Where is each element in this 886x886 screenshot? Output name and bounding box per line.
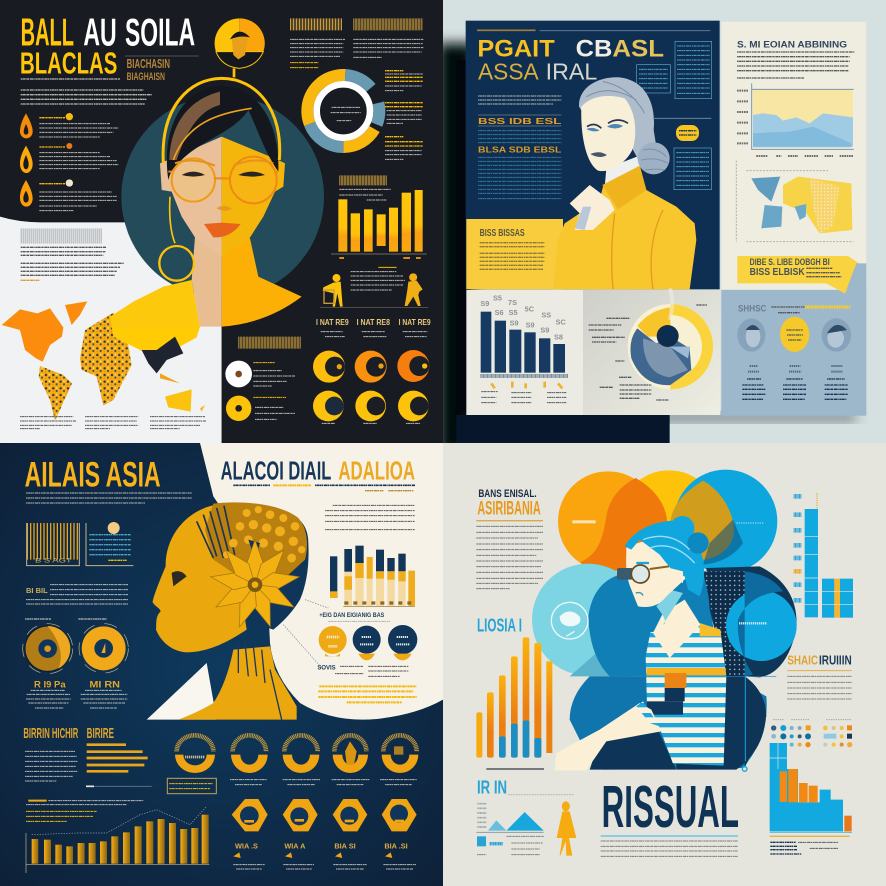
- head icon captions: BIA .SI: [384, 841, 408, 850]
- ring charts: MI RN: [89, 679, 120, 689]
- bar chart: navy: 7S: [508, 298, 517, 307]
- right text: [787, 671, 852, 699]
- panel: bottom-right pale infographic with blue-haired woman: [443, 443, 886, 886]
- panel: bottom left: [466, 290, 583, 415]
- banner callout: BISS ELBISK: [750, 267, 805, 278]
- icon legend: [771, 720, 852, 747]
- panel: bottom-left navy infographic with profile: [0, 443, 443, 886]
- head icon captions: BIA SI: [334, 841, 356, 850]
- text note: BI BIL: [26, 586, 48, 595]
- title: CB: [576, 36, 612, 63]
- white wedge: [147, 663, 217, 720]
- note box: [167, 778, 216, 794]
- icon: discs with notes: [225, 361, 295, 421]
- icon: flower: [209, 540, 301, 630]
- head icons: [232, 799, 417, 831]
- top rule: [477, 28, 536, 33]
- head icon captions: [233, 841, 416, 869]
- portrait: woman with glasses: [110, 78, 324, 328]
- badges: [319, 625, 417, 660]
- left text block: BSS IDB ESL: [478, 116, 562, 126]
- title: SOILA: [125, 11, 195, 54]
- left text: [476, 521, 543, 589]
- pie chart: [589, 288, 713, 400]
- banner callout: DIBE S. LIBE DOBGH BI: [750, 257, 830, 267]
- text boxes: [637, 41, 712, 190]
- bar chart: navy: [480, 294, 568, 403]
- title: BALL: [21, 11, 74, 54]
- map: pale yellow and blue: [736, 161, 854, 242]
- bottom-right bar chart: [770, 743, 852, 854]
- right annotations: [317, 666, 417, 702]
- bar chart: navy: SC: [556, 317, 567, 326]
- heading right: S. MI EOIAN ABBINING: [737, 40, 847, 50]
- bar chart: navy: S5: [493, 294, 502, 303]
- left heading: BANS ENISAL.: [478, 488, 537, 500]
- icon: person: [557, 801, 576, 856]
- yellow box text: [480, 228, 545, 269]
- portraits row: SHHSC: [738, 304, 767, 314]
- label row heading: +EIG DAN EIGIANIG BAS: [319, 613, 384, 619]
- right subtitle: [233, 485, 415, 491]
- panel: top-right poster with yellow sweater: [443, 0, 886, 443]
- small circle charts: [313, 350, 429, 423]
- title rule: [601, 834, 738, 838]
- bar chart: navy: 5C: [525, 305, 535, 314]
- text note: [26, 585, 128, 604]
- bar chart: navy: S9: [480, 299, 489, 308]
- three small stats: I NAT RE9: [399, 317, 431, 327]
- panel: top-left dark portrait infographic: [0, 0, 443, 443]
- panel: cream blob: [200, 443, 443, 720]
- bottom-left heading: BIRRIN HICHIR: [23, 726, 79, 742]
- three small stats: I NAT RE9: [316, 317, 349, 327]
- poster shadow: [438, 43, 856, 453]
- title: AILAIS ASIA: [25, 456, 161, 495]
- bar chart: navy: S9: [510, 319, 519, 328]
- bottom-left heading: BIRIRE: [87, 726, 114, 742]
- bar chart: navy: S5: [509, 308, 518, 317]
- intro text lines: [21, 79, 152, 104]
- panel: bottom right: [721, 290, 866, 416]
- callout: yellow pill: [676, 125, 699, 141]
- portrait: woman in yellow sweater: [553, 77, 711, 289]
- stacked bars: [330, 546, 415, 606]
- overlapping circles: [558, 470, 777, 573]
- top right text: [290, 39, 423, 57]
- mini heading: LIOSIA I: [477, 614, 522, 635]
- right annotations: SOVIS: [317, 666, 336, 672]
- arch captions: [230, 780, 417, 785]
- profile portrait: [153, 502, 309, 720]
- panel: bottom centre: [583, 290, 720, 415]
- subheading: BIAGHAISN: [127, 71, 165, 83]
- icon: top portrait badge: [215, 18, 265, 77]
- icon list: three drops: [20, 113, 118, 211]
- three small stats: [316, 317, 431, 327]
- title: ASL: [612, 36, 664, 63]
- right heading: SHAIC: [787, 653, 818, 667]
- icons: standing figures with text: [320, 267, 428, 307]
- title: RISSUAL: [602, 773, 739, 840]
- section heading: [238, 325, 301, 361]
- donut annotations: [385, 71, 423, 159]
- left text block: BLSA SDB EBSL: [478, 145, 562, 155]
- white area text: [21, 247, 124, 275]
- title: [20, 11, 195, 81]
- mountain chart: [476, 795, 575, 855]
- ring charts: R I9 Pa: [34, 679, 66, 689]
- top right headings: [290, 6, 423, 42]
- rising bars chart: [476, 637, 552, 769]
- connector lines: [283, 600, 328, 670]
- three small stats: I NAT RE8: [357, 317, 390, 327]
- left intro lines: [26, 493, 192, 503]
- icon: brain badge: [551, 602, 588, 639]
- barcode heading: [21, 213, 102, 259]
- title: BLACLAS: [20, 47, 117, 81]
- portrait: woman with blue hair: [555, 516, 726, 770]
- title: IRAL: [546, 58, 597, 84]
- barcode chart and note: B S AGT: [35, 558, 72, 564]
- yellow box text: BISS BISSAS: [480, 228, 525, 239]
- bar chart: navy: S9: [540, 326, 549, 335]
- right heading: [787, 653, 852, 667]
- panel: yellow box: [466, 219, 563, 289]
- right heading: IRUIIIN: [819, 653, 852, 667]
- head icon captions: WIA .S: [235, 841, 258, 850]
- left heading: ASIRIBANIA: [477, 499, 541, 520]
- left heading: [477, 488, 541, 520]
- mini heading IRAN: IR IN: [477, 778, 507, 798]
- bar chart: navy: S6: [495, 308, 504, 317]
- lower blue blobs: [532, 564, 797, 771]
- right title: ALACOI DIAIL: [221, 456, 331, 486]
- title: AU: [83, 11, 117, 54]
- top-right bar chart: [794, 493, 853, 618]
- panel: right cream column: [721, 22, 866, 289]
- bar chart: navy: S9: [526, 320, 535, 329]
- bottom bar chart: [26, 806, 209, 873]
- panel: white map area: [0, 217, 222, 443]
- title: [477, 36, 664, 84]
- arch gauges: [175, 735, 418, 773]
- bar chart: navy: SS: [541, 310, 551, 319]
- world map: [2, 283, 205, 421]
- barcode chart and note: [27, 522, 133, 566]
- title: PGAIT: [477, 36, 555, 63]
- footer text: [601, 841, 738, 856]
- banner callout: [737, 256, 866, 293]
- donut chart: [294, 62, 393, 160]
- left text block: [478, 96, 562, 199]
- subheading: BIACHASIN: [127, 57, 170, 71]
- right text: [737, 52, 855, 78]
- bottom text: [26, 801, 143, 821]
- portraits row: [737, 304, 851, 399]
- title: ASSA: [478, 58, 539, 84]
- panel: navy header: [466, 21, 720, 289]
- head icon captions: WIA A: [284, 841, 306, 850]
- bar chart: [331, 180, 427, 258]
- map footnotes: [20, 417, 206, 429]
- subheading: [127, 57, 170, 83]
- ring charts: [23, 619, 128, 708]
- right paragraph: [325, 505, 415, 530]
- area chart: [737, 83, 854, 156]
- text and horizontal bars: [25, 745, 152, 786]
- bar chart: navy: S8: [554, 332, 563, 341]
